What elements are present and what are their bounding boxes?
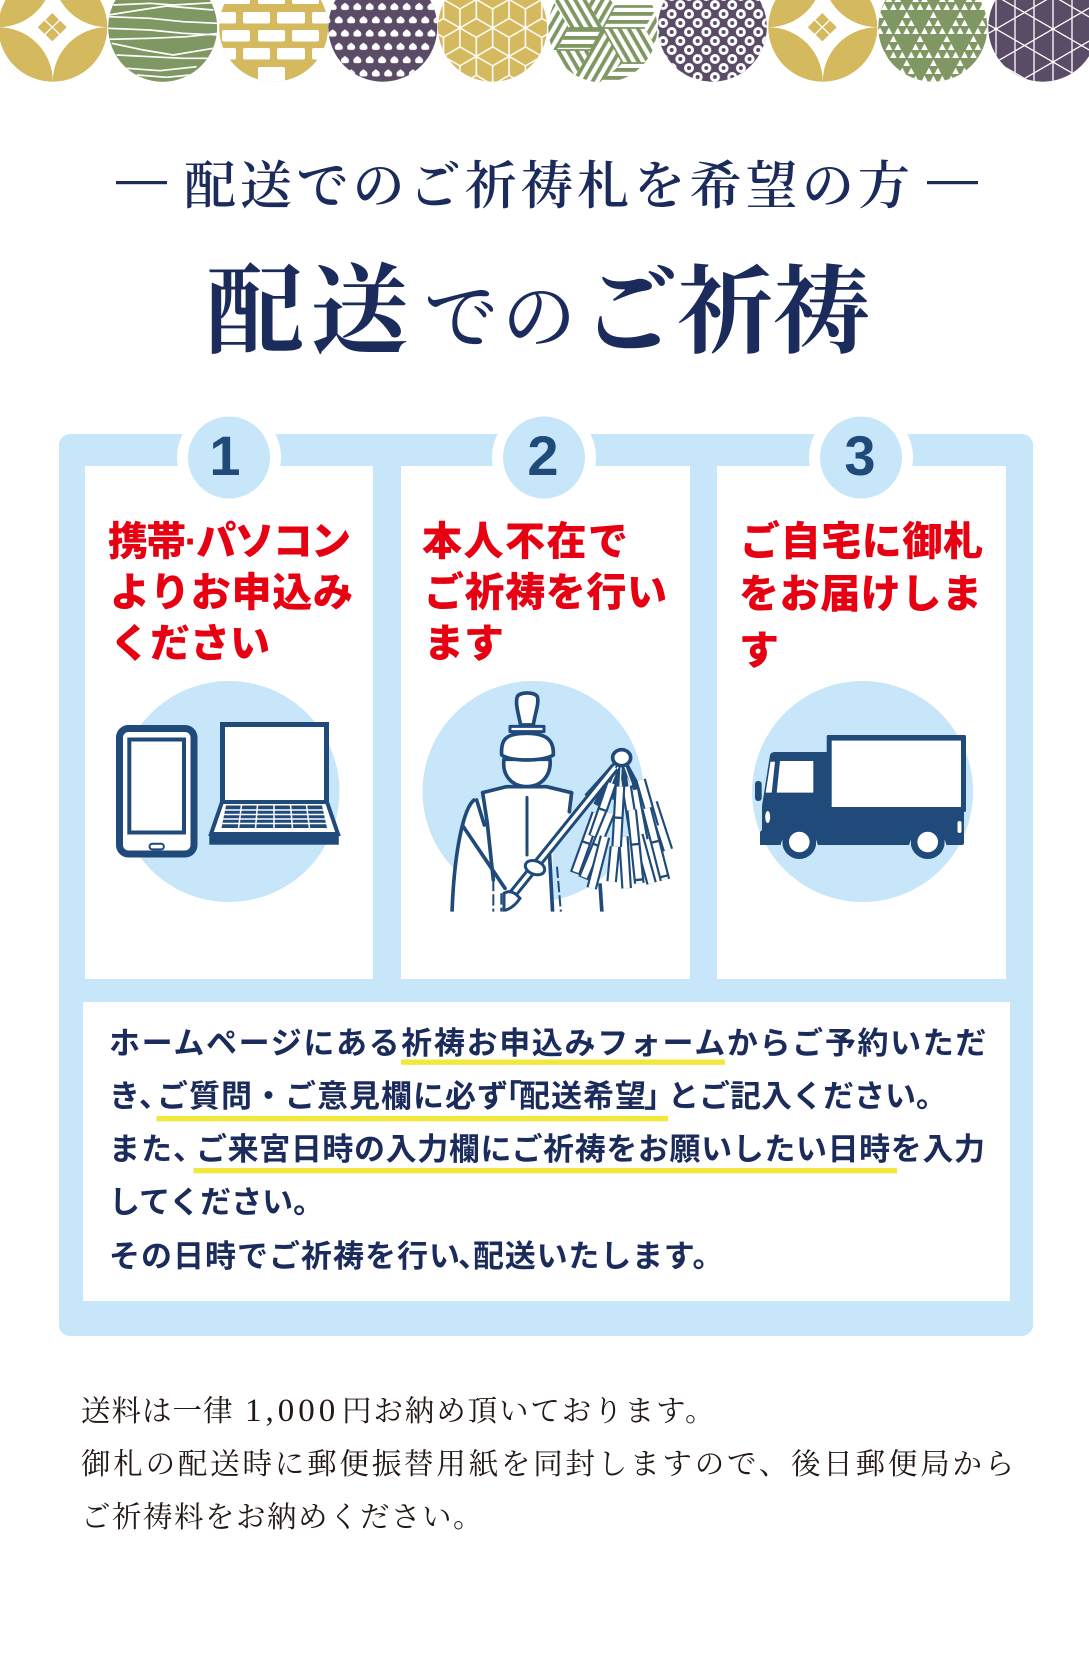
step 3 heading <box>739 519 983 673</box>
subheading with side dashes: 配送でのご祈祷札を希望の方 <box>184 159 910 216</box>
pattern circle: green triangles <box>878 0 987 82</box>
panel: instructions box <box>83 1002 1010 1301</box>
gohei staff and knob <box>504 750 631 911</box>
step 2 heading: ます <box>424 622 504 666</box>
pattern circle: purple rings <box>658 0 767 82</box>
shipping fee note: 御札の配送時に郵便振替用紙を同封しますので、後日郵便局から <box>81 1448 1017 1481</box>
instructions text: してください。 <box>109 1185 324 1220</box>
shipping fee note: 円お納め頂いております。 <box>342 1395 716 1428</box>
gohei paper strips <box>575 758 668 888</box>
instructions text: 、 <box>458 1239 490 1274</box>
step 1 heading <box>108 520 353 666</box>
pattern circle: purple shells <box>328 0 437 82</box>
pattern circle: green hatched hexagons <box>548 0 658 82</box>
illustration: tablet and laptop <box>118 681 340 902</box>
instructions text: また、 <box>109 1132 205 1167</box>
pattern circle: gold shippo star <box>768 0 877 82</box>
step 1 heading: ください <box>110 622 270 666</box>
shipping fee note: ご祈祷料をお納めください。 <box>81 1501 484 1534</box>
shipping fee note: 1,000 <box>245 1393 339 1429</box>
instructions text: き、 <box>109 1079 171 1114</box>
main title: での <box>424 278 580 360</box>
step number 1: 1 <box>209 424 241 487</box>
step 1 heading: 携帯·パソコン <box>108 520 351 564</box>
step 3 heading: ご自宅に御札 <box>740 519 983 564</box>
icon: tablet <box>120 728 194 854</box>
shipping fee note: 送料は一律 <box>81 1395 234 1428</box>
main title: ご祈祷 <box>582 259 870 366</box>
step 2 heading: ご祈祷を行い <box>424 570 667 615</box>
panel: step 2 card <box>401 466 690 979</box>
step number 3 <box>809 406 913 510</box>
instructions text <box>109 1026 988 1274</box>
instructions text: ホームページにある祈祷お申込みフォームからご予約いただ <box>109 1026 988 1061</box>
instructions text: 配送いたします。 <box>473 1239 724 1274</box>
main title <box>206 259 870 367</box>
instructions text: ご来宮日時の入力欄にご祈祷をお願いしたい日時を入力 <box>196 1132 986 1167</box>
step 3 heading: をお届けしま <box>739 572 982 616</box>
instructions text: 」 <box>644 1079 676 1114</box>
pattern circle: gold cubes <box>438 0 547 82</box>
shipping fee note <box>81 1393 1017 1534</box>
instructions text: その日時でご祈祷を行い <box>109 1239 461 1274</box>
panel: step 1 card <box>85 466 373 979</box>
step number 2 <box>492 406 596 510</box>
step number 2: 2 <box>527 424 559 487</box>
step 3 heading: す <box>739 629 779 673</box>
priest figure <box>452 693 602 913</box>
highlight underlines <box>156 1060 897 1173</box>
step number 3: 3 <box>844 424 876 487</box>
pattern circle: green waves <box>108 0 218 82</box>
pattern circle: gold shippo star <box>0 0 107 82</box>
panel: step 3 card <box>717 466 1006 979</box>
icon: truck <box>755 735 966 859</box>
step 1 heading: よりお申込み <box>110 571 353 615</box>
illustration: delivery truck <box>752 681 973 902</box>
panel: steps frame <box>59 434 1033 1336</box>
step 2 heading <box>422 520 667 666</box>
illustration: priest with gohei <box>422 681 668 913</box>
instructions text: 「 <box>491 1079 523 1114</box>
decorative pattern circle band <box>0 0 1089 88</box>
pattern circle: gold bricks <box>219 0 328 82</box>
instructions text: とご記入ください。 <box>668 1079 947 1114</box>
instructions text: 配送希望 <box>519 1079 647 1114</box>
instructions text: ご質問・ご意見欄に必ず <box>157 1079 509 1114</box>
step number 1 <box>177 406 281 510</box>
step 2 heading: 本人不在で <box>422 520 628 564</box>
main title: 配送 <box>206 259 416 367</box>
icon: laptop <box>209 724 339 845</box>
pattern circle: purple lattice <box>988 0 1089 82</box>
